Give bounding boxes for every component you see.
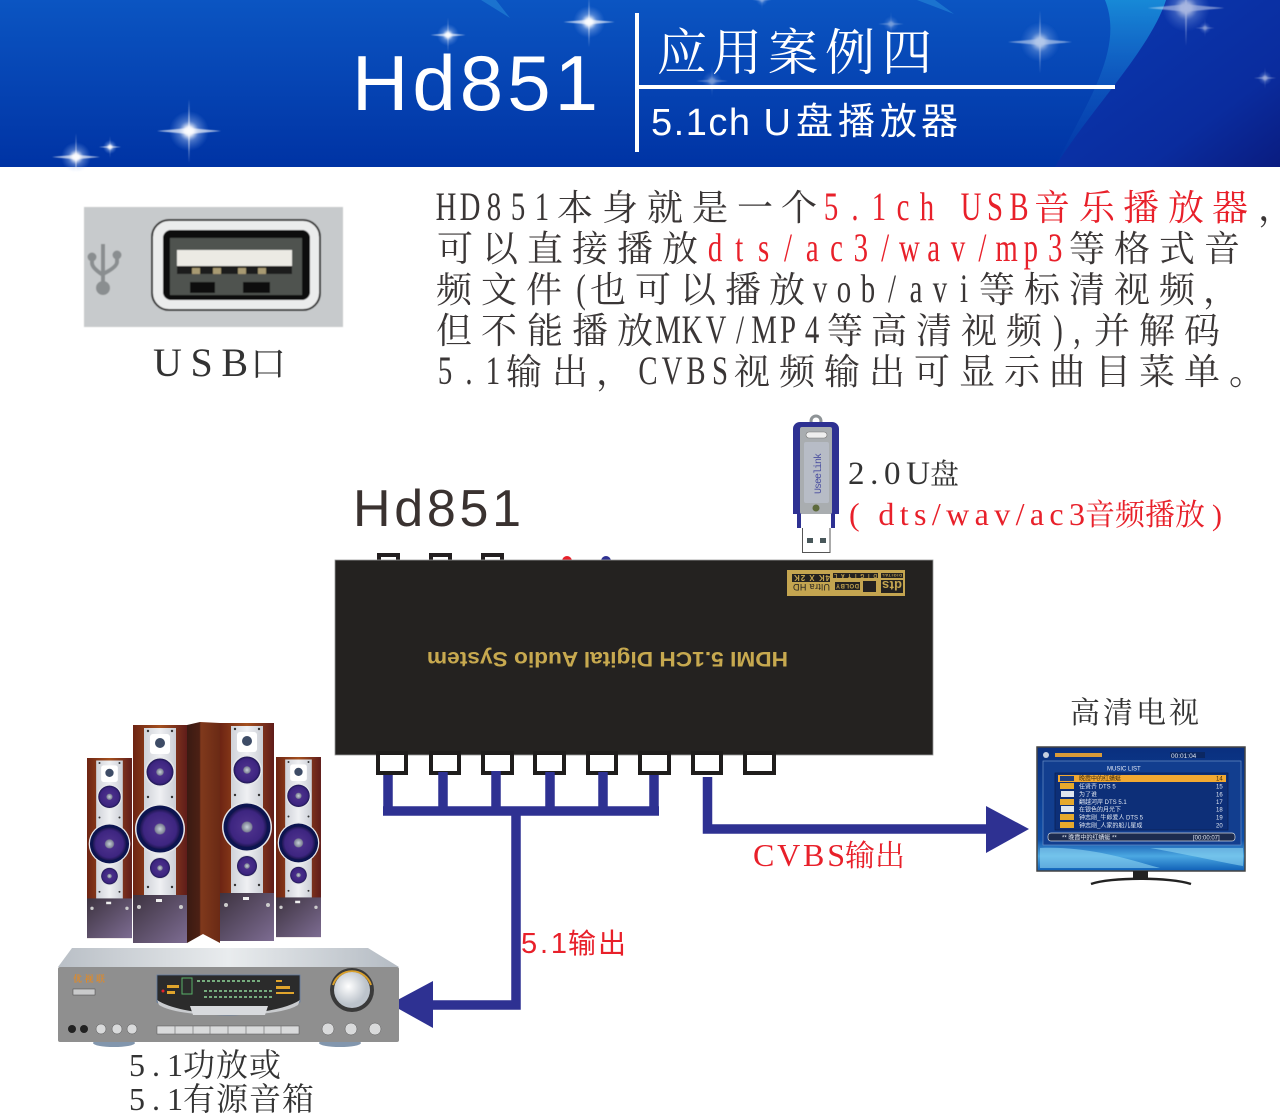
header divider — [637, 13, 1115, 152]
device: television: MUSIC LIST — [1107, 766, 1141, 772]
arrow: CVBS output — [708, 777, 1029, 853]
amplifier caption: 5.1 — [129, 1047, 183, 1083]
amplifier display — [157, 975, 300, 1015]
header subtitle: 盘播放器 — [796, 101, 958, 142]
device: television: 20 — [1216, 824, 1223, 830]
gold logos: DOLBY — [836, 582, 859, 588]
device: 5.1 amplifier — [58, 948, 399, 1047]
device: television: 在银色的月光下 — [1079, 806, 1121, 814]
description text block: 等标清视频， — [979, 270, 1239, 310]
device: television: ** 晚霞中的红蜻蜓 ** — [1062, 834, 1117, 842]
USB drive label: 2.0U — [848, 456, 930, 492]
device: Hd851 box — [335, 555, 933, 773]
device: television — [1037, 747, 1245, 884]
icon: USB trident — [90, 244, 120, 293]
device: television: 19 — [1216, 816, 1223, 822]
device: television: 为了谁 — [1079, 790, 1097, 798]
photo: USB port — [84, 207, 343, 327]
description text block: 音乐播放器 — [1034, 188, 1248, 228]
device: television: 翻越河岸 DTS 5.1 — [1079, 798, 1127, 806]
arrow: 5.1 output — [383, 771, 659, 1028]
gold logos — [787, 570, 905, 596]
gold logos: DIGITAL — [834, 572, 877, 578]
decorative stars — [52, 0, 1276, 181]
description text block: ) — [1053, 307, 1063, 352]
rear output ports — [378, 753, 774, 773]
gold logos: Ultra HD — [792, 582, 830, 592]
description text block — [436, 184, 1280, 393]
amplifier caption — [129, 1047, 314, 1115]
5.1 output label: 输出 — [568, 928, 626, 959]
header title: 应用案例四 — [657, 25, 932, 81]
header subtitle: 5.1ch U — [651, 102, 791, 144]
device: television: [00:00:07] — [1193, 836, 1220, 842]
USB drive label: 盘 — [930, 458, 959, 491]
device: television: 00:01:04 — [1171, 753, 1197, 760]
description text block: 视频输出可显示曲目菜单。 — [734, 352, 1265, 392]
device: television: 晚霞中的红蜻蜓 — [1079, 774, 1121, 782]
TV label: 高清电视 — [1070, 697, 1199, 730]
header model name: Hd851 — [352, 39, 598, 127]
description text block: 输出， — [506, 352, 632, 392]
description text block: ( — [576, 266, 586, 311]
description text block: dts/ac3/wav/mp3 — [708, 225, 1062, 270]
device: television: 钟志刚_牛郎爱人 DTS 5 — [1079, 814, 1144, 822]
description text block: vob/avi — [813, 266, 968, 311]
USB drive format label — [849, 496, 1222, 532]
description text block: MKV/MP4 — [655, 307, 819, 352]
description text block: 也可以播放 — [590, 270, 805, 310]
device: television: 18 — [1216, 808, 1223, 814]
icon: USB flash drive — [793, 416, 839, 552]
amplifier volume knob — [330, 968, 374, 1012]
header subtitle — [651, 101, 958, 144]
device model label: Hd851 — [353, 480, 521, 538]
description text block: , — [1073, 307, 1081, 352]
CVBS label: CVBS — [753, 837, 845, 873]
USB drive format label: 音频播放) — [1085, 499, 1222, 532]
description text block: HD851 — [436, 184, 549, 229]
USB port caption: USB — [153, 340, 248, 385]
description text block: 本身就是一个 — [557, 188, 817, 228]
gold logos: dts — [882, 578, 902, 593]
description text block: CVBS — [638, 348, 728, 393]
device: 5.1 amplifier: 优视联 — [73, 973, 105, 984]
device: television: 任贤齐 DTS 5 — [1079, 782, 1116, 790]
description text block: 5.1 — [438, 348, 500, 393]
top ports — [379, 555, 502, 567]
CVBS label: 输出 — [845, 840, 905, 873]
device: television: 17 — [1216, 800, 1223, 806]
description text block: 并解码 — [1094, 311, 1220, 351]
description text block: 5.1ch — [824, 184, 934, 229]
CVBS label — [753, 837, 905, 873]
device: television: 钟志刚_人家的船儿星成 — [1079, 822, 1142, 830]
device front label: HDMI 5.1CH Digital Audio System — [427, 647, 788, 670]
description text block: 可以直接播放 — [437, 229, 698, 269]
device: television: 16 — [1216, 792, 1223, 798]
gold logos: 4K X 2K — [794, 573, 830, 582]
amplifier buttons — [68, 1025, 88, 1033]
header banner — [0, 0, 1280, 181]
icon: USB flash drive: Useelink — [813, 453, 825, 494]
description text block: 频文件 — [436, 270, 562, 310]
description text block: 等格式音 — [1069, 229, 1240, 269]
amplifier caption: 功放或 — [183, 1047, 281, 1083]
USB port caption: 口 — [250, 344, 286, 384]
speakers — [87, 722, 321, 943]
device: television: 14 — [1216, 776, 1223, 782]
USB drive format label: ( dts/wav/ac3 — [849, 496, 1085, 532]
5.1 output label — [521, 928, 626, 960]
description text block: 等高清视频 — [827, 311, 1043, 351]
gold logos: DIGITAL — [881, 573, 902, 578]
description text block: USB — [961, 184, 1029, 229]
5.1 output label: 5.1 — [521, 928, 567, 960]
description text block: 但不能播放 — [436, 311, 653, 351]
device: television: 15 — [1216, 784, 1223, 790]
